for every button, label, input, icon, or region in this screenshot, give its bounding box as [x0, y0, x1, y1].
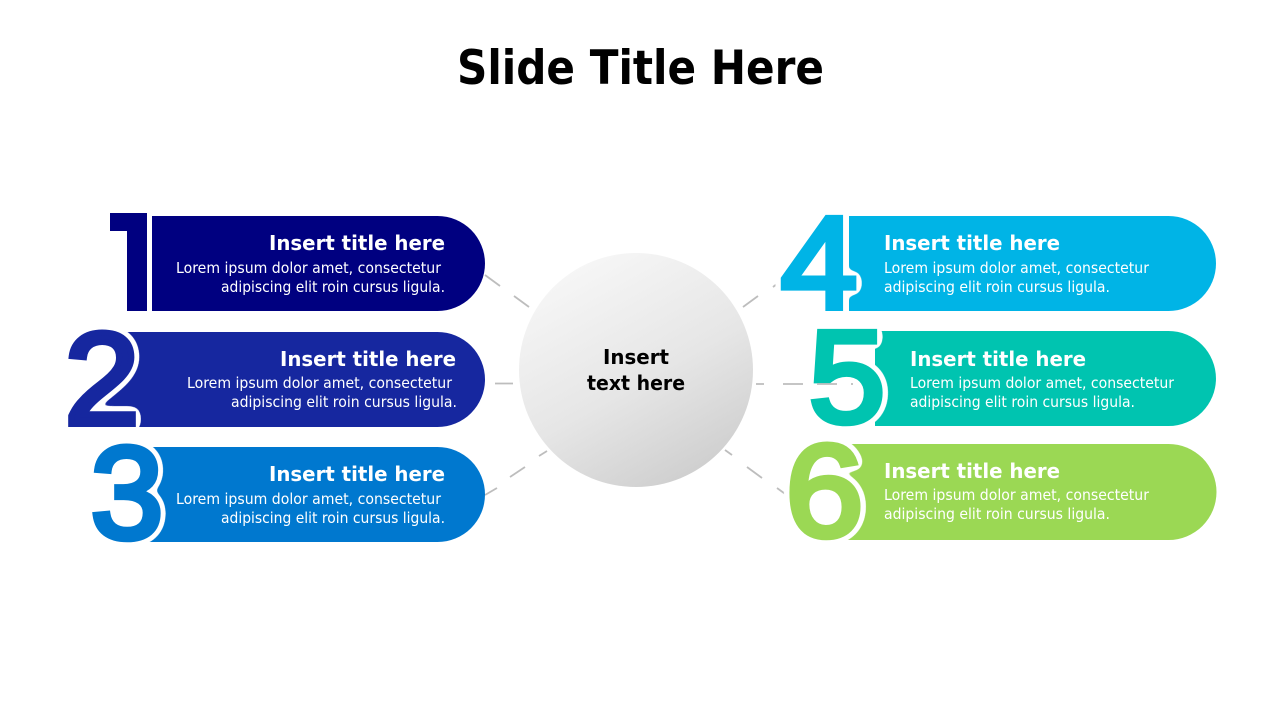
- item 4 text: adipiscing elit roin cursus ligula.: [884, 278, 1110, 296]
- number 1: 1: [99, 192, 171, 339]
- central circle text: Insert: [603, 345, 669, 369]
- item 1 text: Lorem ipsum dolor amet, consectetur: [176, 259, 442, 277]
- item 1: [110, 213, 485, 311]
- item 2 text: Lorem ipsum dolor amet, consectetur: [187, 374, 453, 392]
- item 5: [756, 304, 1216, 450]
- item 3 text: Insert title here: [269, 462, 445, 486]
- item 4 text: Lorem ipsum dolor amet, consectetur: [884, 259, 1150, 277]
- item 1 text: [176, 231, 445, 296]
- item 6 text: adipiscing elit roin cursus ligula.: [884, 505, 1110, 523]
- number 5: 5: [809, 304, 885, 450]
- item 1 text: adipiscing elit roin cursus ligula.: [221, 278, 445, 296]
- item 2: [64, 307, 485, 453]
- item 6: [786, 417, 1216, 564]
- item 3 text: [176, 462, 445, 527]
- number 2: 2: [64, 307, 140, 453]
- item 6 text: Lorem ipsum dolor amet, consectetur: [884, 486, 1150, 504]
- item 2 text: [187, 347, 457, 411]
- item 3 text: adipiscing elit roin cursus ligula.: [221, 509, 445, 527]
- central circle: [519, 253, 753, 487]
- item 5 text: adipiscing elit roin cursus ligula.: [910, 393, 1135, 411]
- number 6: 6: [786, 417, 863, 564]
- number 1: [110, 213, 147, 311]
- item 3: [91, 419, 485, 566]
- item 2 text: adipiscing elit roin cursus ligula.: [231, 393, 457, 411]
- item 5 text: Lorem ipsum dolor amet, consectetur: [910, 374, 1175, 392]
- central circle text: [587, 345, 685, 395]
- connector across number 5: [756, 383, 853, 385]
- item 6 text: Insert title here: [884, 459, 1060, 483]
- item 4 text: Insert title here: [884, 231, 1060, 255]
- number 4: 4: [781, 190, 857, 336]
- item 5 text: Insert title here: [910, 347, 1086, 371]
- title: Slide Title Here: [457, 41, 824, 96]
- central circle text: text here: [587, 371, 685, 395]
- item 5 text: [910, 347, 1175, 411]
- dashed connectors: [485, 275, 788, 496]
- item 3 text: Lorem ipsum dolor amet, consectetur: [176, 490, 442, 508]
- item 6 text: [884, 459, 1150, 523]
- item 4 text: [884, 231, 1150, 296]
- item 1 text: Insert title here: [269, 231, 445, 255]
- item 4: [781, 190, 1216, 336]
- number 3: 3: [91, 419, 163, 566]
- item 2 text: Insert title here: [280, 347, 456, 371]
